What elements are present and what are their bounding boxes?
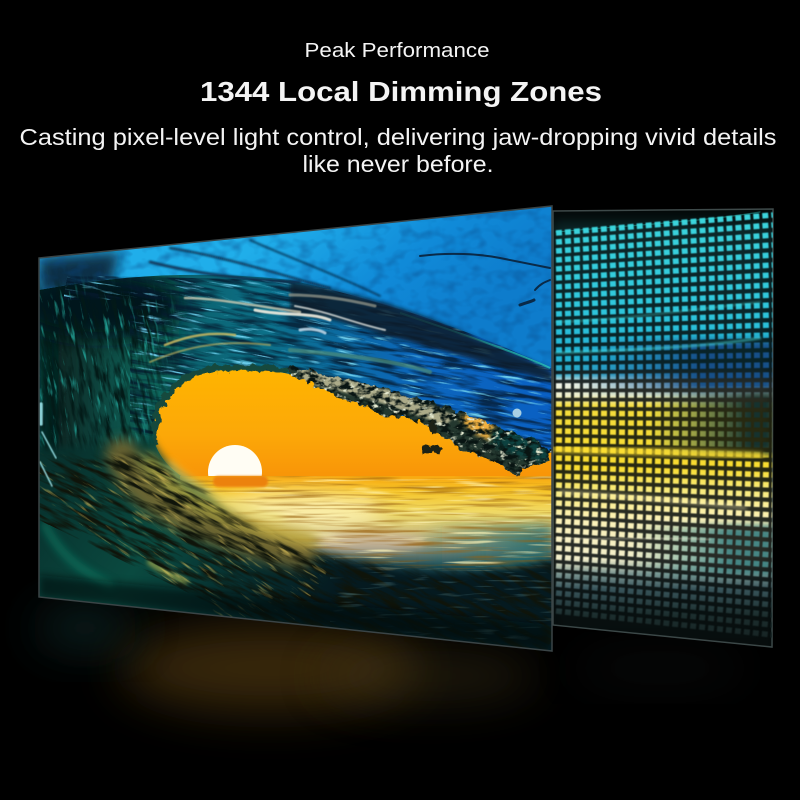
text block: description: Casting pixel-level light control, delivering jaw-dropping vivid details (20, 124, 777, 150)
top left shadow (15, 271, 185, 339)
left wall texture (40, 277, 176, 451)
heading: title: 1344 Local Dimming Zones (200, 76, 602, 107)
sun (208, 445, 262, 476)
text block: description (20, 124, 777, 177)
dark water ripples (330, 572, 552, 642)
breaking lip (288, 365, 552, 476)
sky (39, 206, 552, 376)
sea (180, 476, 552, 576)
sun reflection (213, 476, 268, 487)
spray at left edge (40, 404, 56, 486)
floor reflection glow (35, 610, 750, 712)
panel: LED backlight grid (553, 205, 775, 655)
lower wave texture (40, 451, 552, 649)
screen frame (39, 206, 552, 651)
opening rough fringe (155, 367, 290, 445)
upper wave body (40, 274, 552, 453)
bottom vignette (39, 575, 552, 651)
heading: eyebrow: Peak Performance (304, 40, 490, 62)
panel: TV screen with wave (38, 205, 553, 652)
teal crest line (400, 313, 550, 368)
light streaks (556, 212, 760, 540)
foam highlights upper wave (150, 295, 430, 372)
sky dark reach lines (150, 240, 550, 305)
dark crest band (290, 282, 552, 382)
sunset opening (153, 369, 552, 482)
lip fragments (420, 421, 442, 454)
lower left wave (40, 437, 552, 618)
golden curl band (45, 455, 310, 585)
foam bubble (512, 408, 522, 418)
text block: description: like never before. (302, 151, 494, 177)
upper wave texture (64, 276, 552, 450)
left wave wall (40, 320, 174, 452)
